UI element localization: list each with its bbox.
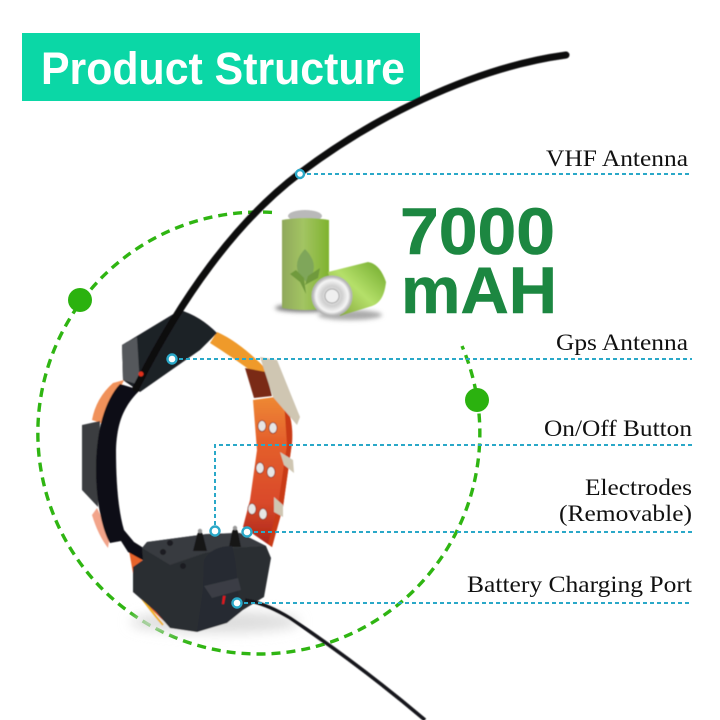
leader line: GPS antenna bbox=[168, 354, 692, 364]
icon: leaf bbox=[290, 249, 320, 294]
GPS antenna block bbox=[122, 310, 217, 392]
strap rivets bbox=[248, 420, 277, 520]
label: Gps Antenna: Gps Antenna bbox=[556, 330, 689, 356]
leader line: VHF antenna bbox=[296, 170, 692, 178]
title banner: Product Structure bbox=[41, 43, 405, 94]
ground shadow bbox=[130, 611, 300, 633]
capacity text: mAH bbox=[401, 253, 557, 327]
VHF antenna bbox=[136, 55, 566, 388]
leader line: on/off button bbox=[210, 445, 692, 536]
green dashed orbit with dots bbox=[38, 212, 489, 654]
left module bbox=[82, 421, 100, 507]
capacity text: 7000 bbox=[400, 194, 555, 268]
receiver body bbox=[133, 533, 271, 632]
charging cable bbox=[245, 600, 425, 720]
label: Electrodes (Removable): (Removable) bbox=[559, 501, 692, 527]
label: Electrodes (Removable): Electrodes bbox=[585, 475, 692, 501]
screw details bbox=[167, 540, 173, 546]
capacity text bbox=[400, 194, 557, 327]
electrode posts bbox=[193, 528, 241, 551]
battery icon bbox=[275, 210, 386, 320]
label: Electrodes (Removable) bbox=[559, 475, 692, 527]
leader line: charging port bbox=[232, 598, 692, 608]
leader line: electrodes bbox=[242, 528, 692, 536]
metal buckle bbox=[260, 357, 300, 425]
collar device bbox=[82, 55, 566, 720]
label: VHF Antenna: VHF Antenna bbox=[546, 146, 689, 172]
collar strap right lower bbox=[243, 396, 292, 547]
black left strap bbox=[96, 384, 150, 562]
charging clip bbox=[197, 546, 240, 632]
label: On/Off Button: On/Off Button bbox=[544, 416, 692, 442]
label: Battery Charging Port: Battery Charging Port bbox=[467, 572, 692, 598]
orange strap left side bbox=[92, 380, 124, 424]
collar strap right upper bbox=[210, 332, 270, 385]
